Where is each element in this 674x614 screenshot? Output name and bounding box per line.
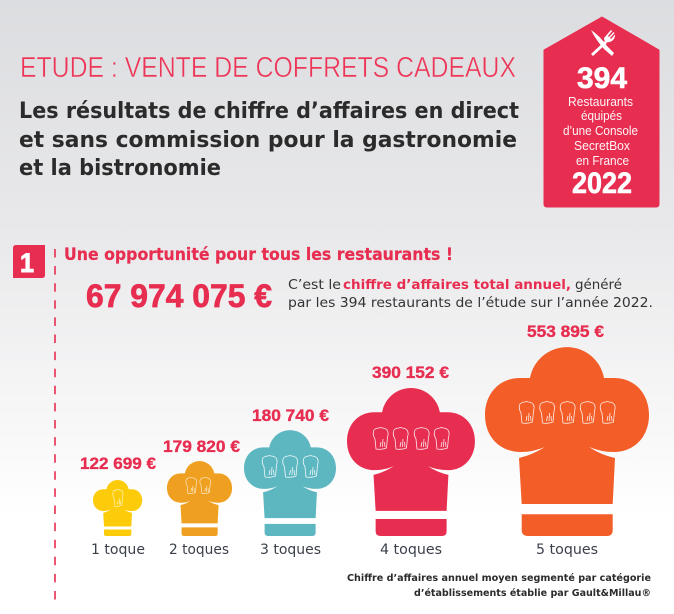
label: 4 toques: 4 toques: [380, 542, 442, 558]
description: chiffre d’affaires total annuel,: [343, 277, 571, 293]
heading: subtitle: Les résultats de chiffre d’affaires en direct: [19, 99, 519, 124]
description: généré: [575, 277, 622, 293]
section number 1: 1: [20, 248, 34, 278]
heading: subtitle: et la bistronomie: [19, 156, 221, 181]
label: 5 toques: 5 toques: [536, 542, 598, 558]
section number 1: [13, 245, 45, 278]
badge text: en France: [576, 154, 629, 168]
badge text: équipés: [581, 109, 622, 123]
panel: badge 394 restaurants: [544, 17, 659, 207]
badge text: d’une Console: [563, 124, 638, 138]
value: 2 toques: 179 820 €: [163, 437, 241, 456]
badge year: 2022: [572, 167, 632, 200]
title: ETUDE : VENTE DE COFFRETS CADEAUX: [20, 52, 516, 84]
section heading: Une opportunité pour tous les restaurants !: [64, 245, 453, 264]
label: 1 toque: 1 toque: [91, 542, 145, 558]
total figure: 67 974 075 €: [86, 278, 272, 314]
heading: subtitle: [19, 99, 519, 181]
badge text: SecretBox: [574, 139, 631, 153]
badge number: 394: [577, 62, 627, 95]
footnote: [347, 573, 651, 599]
icon: hat 2 toques: [167, 461, 232, 536]
footnote: Chiffre d’affaires annuel moyen segmenté par catégorie: [347, 573, 651, 584]
icon: knife and fork: [591, 30, 615, 56]
value: 5 toques: 553 895 €: [527, 322, 605, 341]
description: [288, 277, 653, 311]
icon: hat 1 toque: [93, 480, 142, 536]
heading: subtitle: et sans commission pour la gastronomie: [19, 128, 517, 153]
badge text: Restaurants: [568, 95, 633, 109]
badge text: [563, 95, 638, 168]
value: 3 toques: 180 740 €: [252, 406, 330, 425]
value: 4 toques: 390 152 €: [372, 363, 450, 382]
icon: hat 3 toques: [244, 430, 336, 536]
label: 3 toques: 3 toques: [260, 542, 321, 558]
label: 2 toques: 2 toques: [169, 542, 229, 558]
description: par les 394 restaurants de l’étude sur l’année 2022.: [288, 295, 653, 311]
icon: hat 5 toques: [485, 347, 649, 536]
description: C’est le: [288, 277, 341, 293]
icon: hat 4 toques: [347, 388, 475, 536]
footnote: d’établissements établie par Gault&Millau®: [414, 588, 651, 599]
value: 1 toque: 122 699 €: [80, 454, 157, 473]
